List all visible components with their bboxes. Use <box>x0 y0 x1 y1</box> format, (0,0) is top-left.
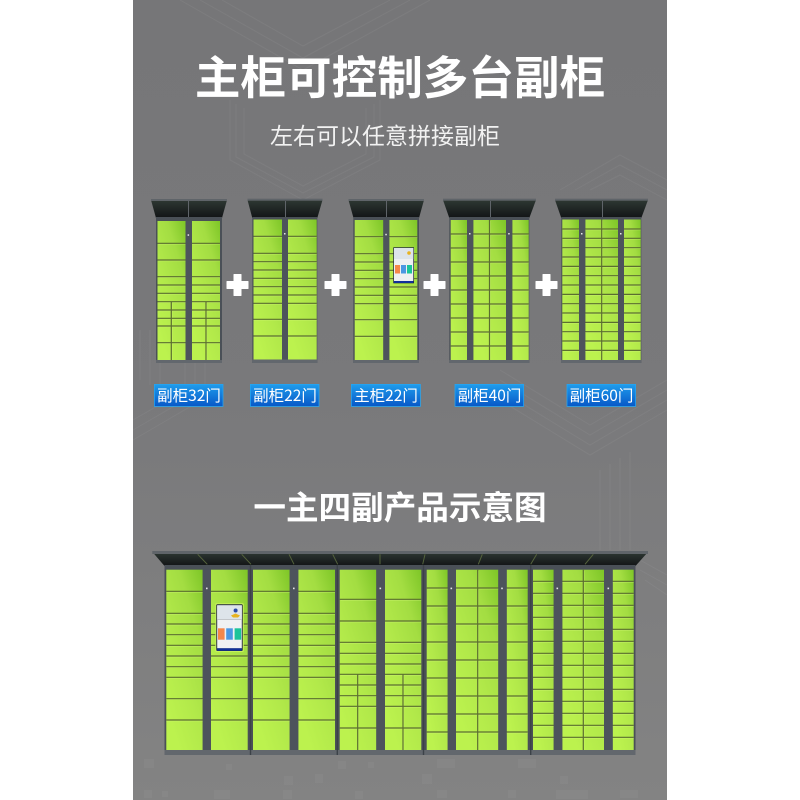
locker: secondary cabinet 60 doors <box>555 199 648 363</box>
label: 主柜22门: 主柜22门 <box>354 384 418 406</box>
locker: secondary cabinet 22 doors <box>248 199 322 363</box>
combined locker: one main and four secondary <box>152 551 648 755</box>
background panel <box>133 0 667 800</box>
secondary 60-door cabinet doors <box>533 570 634 750</box>
locker: secondary cabinet 32 doors <box>151 199 227 363</box>
plus sign <box>424 274 445 296</box>
subtitle: 左右可以任意拼接副柜 <box>270 123 500 149</box>
secondary 32-door cabinet doors <box>340 570 421 750</box>
circuit background pattern <box>133 0 667 595</box>
main cabinet doors <box>166 570 248 750</box>
locker: main cabinet 22 doors with screen <box>348 199 424 363</box>
secondary 40-door cabinet doors <box>427 570 528 750</box>
bottom pixel pattern <box>144 759 638 799</box>
secondary 22-door cabinet doors <box>253 570 335 750</box>
title: 主柜可控制多台副柜 <box>195 53 605 104</box>
label: 副柜32门: 副柜32门 <box>157 384 221 406</box>
section heading: 一主四副产品示意图 <box>253 489 547 526</box>
label: 副柜22门: 副柜22门 <box>253 384 317 406</box>
plus sign <box>536 274 557 296</box>
label: 副柜40门: 副柜40门 <box>458 384 521 406</box>
locker: secondary cabinet 40 doors <box>443 199 536 363</box>
touch screen <box>393 247 414 283</box>
plus sign <box>325 274 346 296</box>
label: 副柜60门: 副柜60门 <box>570 384 633 406</box>
plus sign <box>227 274 248 296</box>
touch screen <box>215 603 244 652</box>
